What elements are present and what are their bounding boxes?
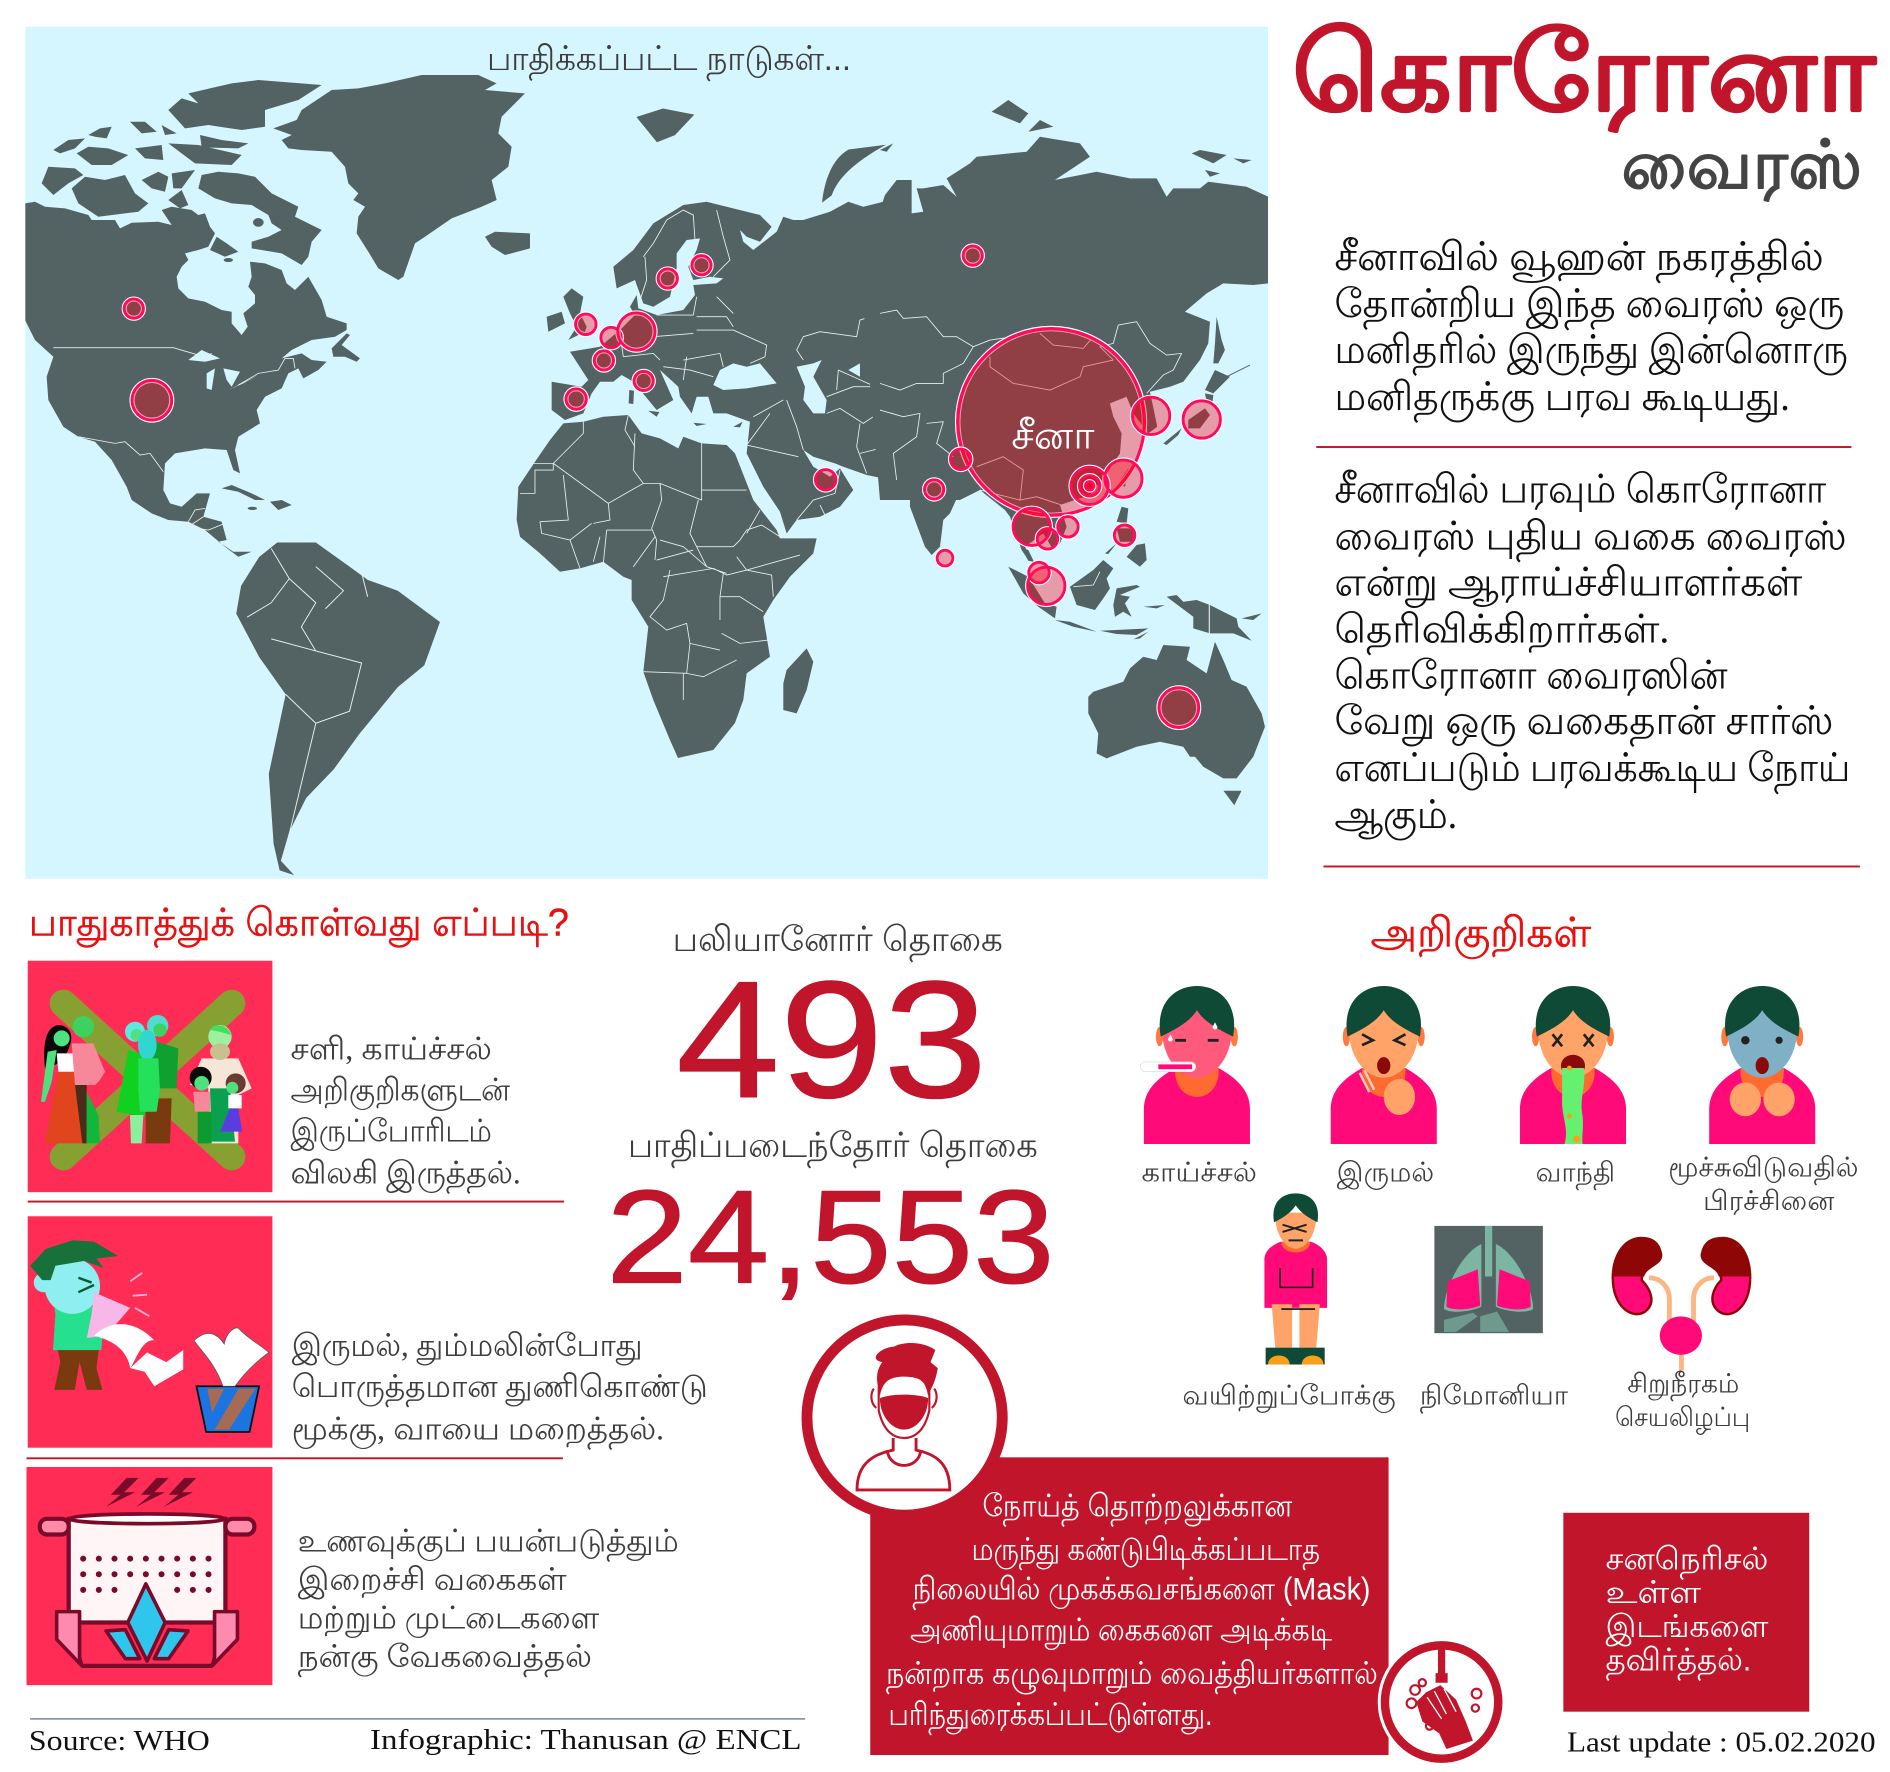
southeast asia and australia <box>1008 507 1265 778</box>
description text <box>1334 468 1850 840</box>
text: cooking: நன்கு வேகவைத்தல் <box>298 1639 592 1677</box>
credit: Infographic: Thanusan @ ENCL <box>370 1724 802 1756</box>
heading: prevention: பாதுகாத்துக் கொள்வது எப்படி? <box>29 901 569 948</box>
icon: fever <box>1140 986 1250 1144</box>
text: cooking: மற்றும் முட்டைகளை <box>298 1601 599 1638</box>
panel: avoid crowds: சனநெரிசல் <box>1606 1541 1768 1579</box>
china label: சீனா <box>1011 414 1095 457</box>
text: cooking: இறைச்சி வகைகள் <box>298 1562 567 1599</box>
panel: isolation illustration <box>28 961 272 1192</box>
heading: symptoms: அறிகுறிகள் <box>1370 909 1591 959</box>
panel: avoid crowds: உள்ள <box>1606 1575 1701 1610</box>
text: cooking: உணவுக்குப் பயன்படுத்தும் <box>298 1523 679 1561</box>
description text: சீனாவில் பரவும் கொரோனா <box>1334 468 1826 512</box>
label: fever: காய்ச்சல் <box>1141 1156 1257 1187</box>
icon: cough <box>1331 986 1437 1144</box>
panel: avoid crowds: தவிர்த்தல். <box>1606 1643 1751 1681</box>
subtitle: வைரஸ் <box>1621 128 1862 203</box>
deaths label: பலியானோர் தொகை <box>673 920 1003 962</box>
text: mask advice: மருந்து கண்டுபிடிக்கப்படாத <box>972 1532 1320 1570</box>
label: breathing <box>1668 1151 1859 1216</box>
label: vomit: வாந்தி <box>1536 1156 1615 1190</box>
intro text: தோன்றிய இந்த வைரஸ் ஒரு <box>1334 282 1844 330</box>
text: isolation <box>290 1032 521 1194</box>
intro text <box>1334 235 1848 423</box>
cases label: பாதிப்படைந்தோர் தொகை <box>628 1126 1038 1169</box>
svalbard <box>636 109 694 142</box>
text: mask advice: பரிந்துரைக்கப்பட்டுள்ளது. <box>888 1697 1213 1735</box>
map markers <box>122 244 1222 729</box>
text: mask advice <box>886 1488 1378 1735</box>
source: Source: WHO <box>29 1725 210 1757</box>
description text: என்று ஆராய்ச்சியாளர்கள் <box>1334 561 1802 608</box>
icon: breathing difficulty <box>1709 986 1815 1144</box>
deaths number: 493 <box>676 947 987 1133</box>
intro text: மனிதருக்கு பரவ கூடியது. <box>1334 375 1790 423</box>
novaya zemlya <box>822 145 886 203</box>
label: pneumonia: நிமோனியா <box>1420 1379 1569 1413</box>
label: cough: இருமல் <box>1337 1156 1434 1190</box>
panel: cooking illustration <box>27 1467 272 1685</box>
south america <box>236 542 1242 875</box>
text: isolation: அறிகுறிகளுடன் <box>290 1073 510 1111</box>
text: cooking <box>298 1523 679 1677</box>
description text: கொரோனா வைரஸின் <box>1334 653 1728 697</box>
description text: வைரஸ் புதிய வகை வைரஸ் <box>1334 515 1847 563</box>
north america and greenland <box>25 75 530 557</box>
text: isolation: இருப்போரிடம் <box>290 1114 492 1151</box>
cases number: 24,553 <box>606 1164 1055 1312</box>
text: cover <box>292 1328 708 1449</box>
label: diarrhoea: வயிற்றுப்போக்கு <box>1182 1379 1396 1413</box>
description text: வேறு ஒரு வகைதான் சார்ஸ் <box>1334 699 1833 747</box>
panel: avoid crowds: இடங்களை <box>1606 1609 1768 1646</box>
panel: avoid crowds <box>1563 1513 1809 1712</box>
label: kidney failure <box>1615 1368 1750 1435</box>
text: mask advice: நன்றாக கழுவுமாறும் வைத்தியர்களால் <box>886 1656 1378 1694</box>
icon: pneumonia x-ray <box>1434 1226 1543 1333</box>
title <box>1292 12 1876 203</box>
intro text: சீனாவில் வூஹன் நகரத்தில் <box>1334 235 1824 283</box>
icon: diarrhoea <box>1264 1193 1327 1365</box>
text: isolation: விலகி இருத்தல். <box>290 1156 521 1194</box>
label: kidney failure: சிறுநீரகம் <box>1627 1368 1739 1401</box>
text: mask advice: நிலையில் முகக்கவசங்களை (Mask) <box>912 1572 1370 1611</box>
text: mask advice: அணியுமாறும் கைகளை அடிக்கடி <box>910 1613 1332 1650</box>
eurasia east <box>860 100 1268 562</box>
last update: Last update : 05.02.2020 <box>1567 1726 1876 1758</box>
eurasia west and africa <box>516 202 956 758</box>
text: cover: பொருத்தமான துணிகொண்டு <box>292 1369 708 1407</box>
icon: kidneys <box>1613 1238 1750 1371</box>
panel: mask advice <box>807 1320 1389 1755</box>
description text: எனப்படும் பரவக்கூடிய நோய் <box>1334 746 1850 794</box>
description text: தெரிவிக்கிறார்கள். <box>1334 608 1669 656</box>
description text: ஆகும். <box>1334 793 1457 840</box>
icon: person with mask <box>807 1320 1002 1515</box>
map title: பாதிக்கப்பட்ட நாடுகள்... <box>487 40 851 81</box>
label: breathing: பிரச்சினை <box>1703 1185 1835 1216</box>
intro text: மனிதரில் இருந்து இன்னொரு <box>1334 328 1848 376</box>
panel: sneeze illustration <box>28 1216 272 1448</box>
text: isolation: சளி, காய்ச்சல் <box>290 1032 492 1067</box>
title: கொரோனா <box>1292 12 1876 133</box>
text: cover: மூக்கு, வாயை மறைத்தல். <box>292 1411 664 1449</box>
text: mask advice: நோய்த் தொற்றலுக்கான <box>982 1488 1292 1526</box>
icon: hand washing <box>1378 1638 1505 1766</box>
text: cover: இருமல், தும்மலின்போது <box>292 1328 642 1365</box>
label: kidney failure: செயலிழப்பு <box>1615 1402 1750 1435</box>
label: breathing: மூச்சுவிடுவதில் <box>1668 1151 1859 1185</box>
panel: world map <box>25 27 1268 879</box>
icon: vomit <box>1520 986 1626 1144</box>
